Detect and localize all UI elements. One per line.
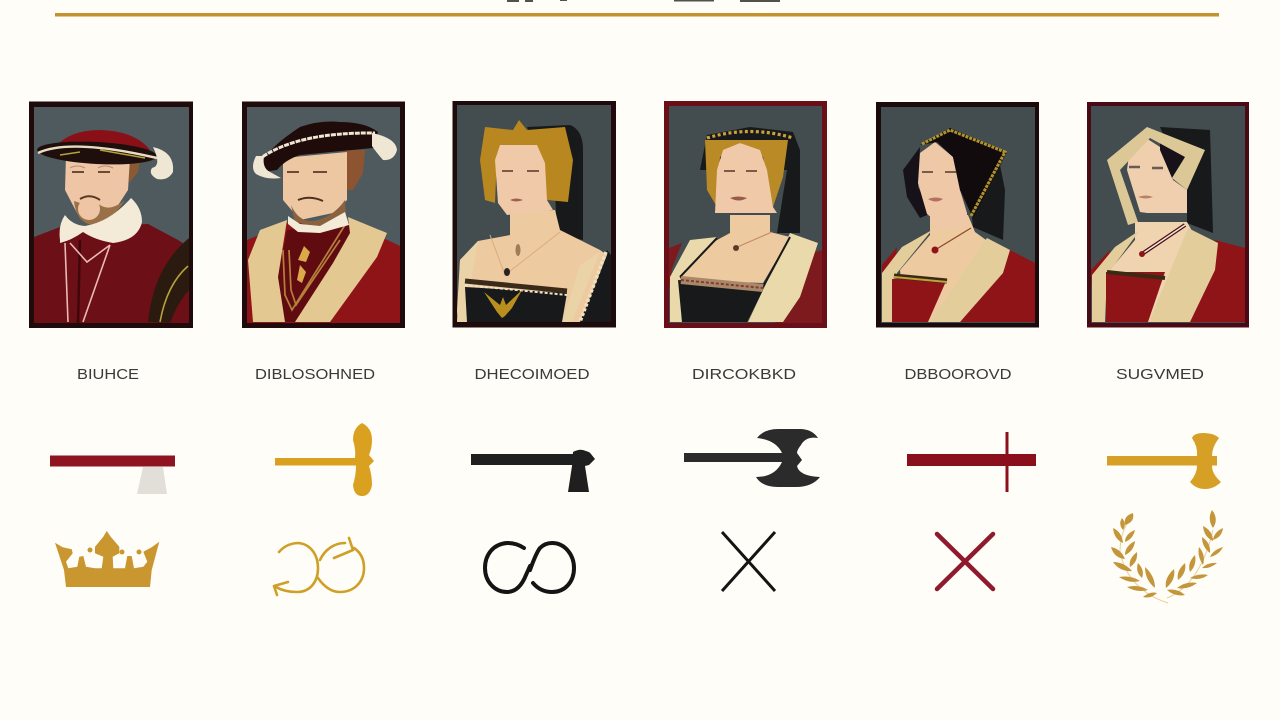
- fur: [1092, 230, 1140, 322]
- icon: red cross: [937, 534, 993, 589]
- icon: gold axe: [275, 423, 374, 496]
- icon: crown: [55, 531, 159, 587]
- ruff: [288, 212, 349, 233]
- chest: [1110, 222, 1200, 322]
- label: sixth status: SUGVMED: [1116, 366, 1204, 383]
- icon: red sword: [907, 432, 1036, 492]
- face: [283, 152, 347, 220]
- robe: [247, 222, 400, 323]
- necklace: [735, 232, 772, 248]
- bodice: [892, 279, 947, 322]
- dress: [465, 287, 567, 322]
- portrait 4: queen with pearl hood: [664, 101, 827, 328]
- fur: [248, 220, 287, 322]
- portrait 5: queen with black gable hood: [876, 102, 1039, 328]
- bodice: [1106, 272, 1165, 322]
- hat: [260, 122, 378, 172]
- face: [1127, 138, 1187, 213]
- robe: [34, 224, 189, 323]
- icon: black battle axe: [684, 429, 820, 487]
- icon: black cross: [722, 532, 775, 591]
- face: [918, 142, 967, 228]
- label: first status: BIUHCE: [77, 366, 139, 383]
- header rule: [55, 13, 1219, 16]
- label: second status: DIBLOSOHNED: [255, 366, 375, 383]
- icon: red bar with grey blade: [50, 456, 175, 494]
- feathers: [253, 156, 281, 178]
- dress: [678, 280, 763, 322]
- label: third status: DHECOIMOED: [474, 366, 590, 383]
- pearls: [707, 132, 793, 138]
- fur: [670, 237, 717, 322]
- label: fifth status: DBBOOROVD: [904, 366, 1012, 383]
- hair: [705, 140, 788, 207]
- hood: [1107, 127, 1205, 225]
- chain: [283, 225, 345, 310]
- feather: [151, 147, 173, 179]
- label: fourth status: DIRCOKBKD: [692, 366, 796, 383]
- sleeve: [578, 250, 611, 322]
- icon: gold double axe: [1107, 433, 1221, 489]
- left hair: [903, 147, 932, 218]
- icon: black interlocked rings: [485, 543, 574, 592]
- hood: [920, 128, 1007, 218]
- chest: [457, 210, 607, 322]
- face: [65, 155, 130, 222]
- hair: [480, 120, 573, 203]
- right branch: [1166, 510, 1223, 598]
- hat: [55, 130, 150, 150]
- red dress: [1091, 240, 1245, 322]
- portrait 3: queen with gold hood: [452, 101, 616, 328]
- veil: [700, 127, 800, 233]
- beard: [74, 200, 125, 225]
- necklace: [935, 228, 971, 250]
- chest: [900, 215, 1000, 322]
- necklace: [490, 232, 560, 275]
- hair: [345, 150, 365, 190]
- left branch: [1111, 513, 1168, 603]
- emblem: [484, 290, 522, 318]
- face: [495, 145, 553, 215]
- icon: gold interlocked rings: [274, 538, 364, 595]
- title remnant cropped at top edge: [507, 0, 780, 2]
- face: [715, 143, 777, 213]
- portrait 2: king in black hat: [242, 102, 405, 328]
- icon: laurel wreath: [1111, 510, 1223, 603]
- necklace: [1142, 225, 1185, 254]
- fur: [882, 230, 932, 322]
- icon: black axe: [471, 450, 595, 492]
- chest: [680, 215, 790, 283]
- portrait 1: king in red hat: [29, 102, 193, 328]
- collar: [60, 198, 142, 243]
- hair: [122, 158, 140, 182]
- portrait 6: queen with cream gable hood: [1087, 102, 1249, 328]
- red dress: [882, 247, 1035, 322]
